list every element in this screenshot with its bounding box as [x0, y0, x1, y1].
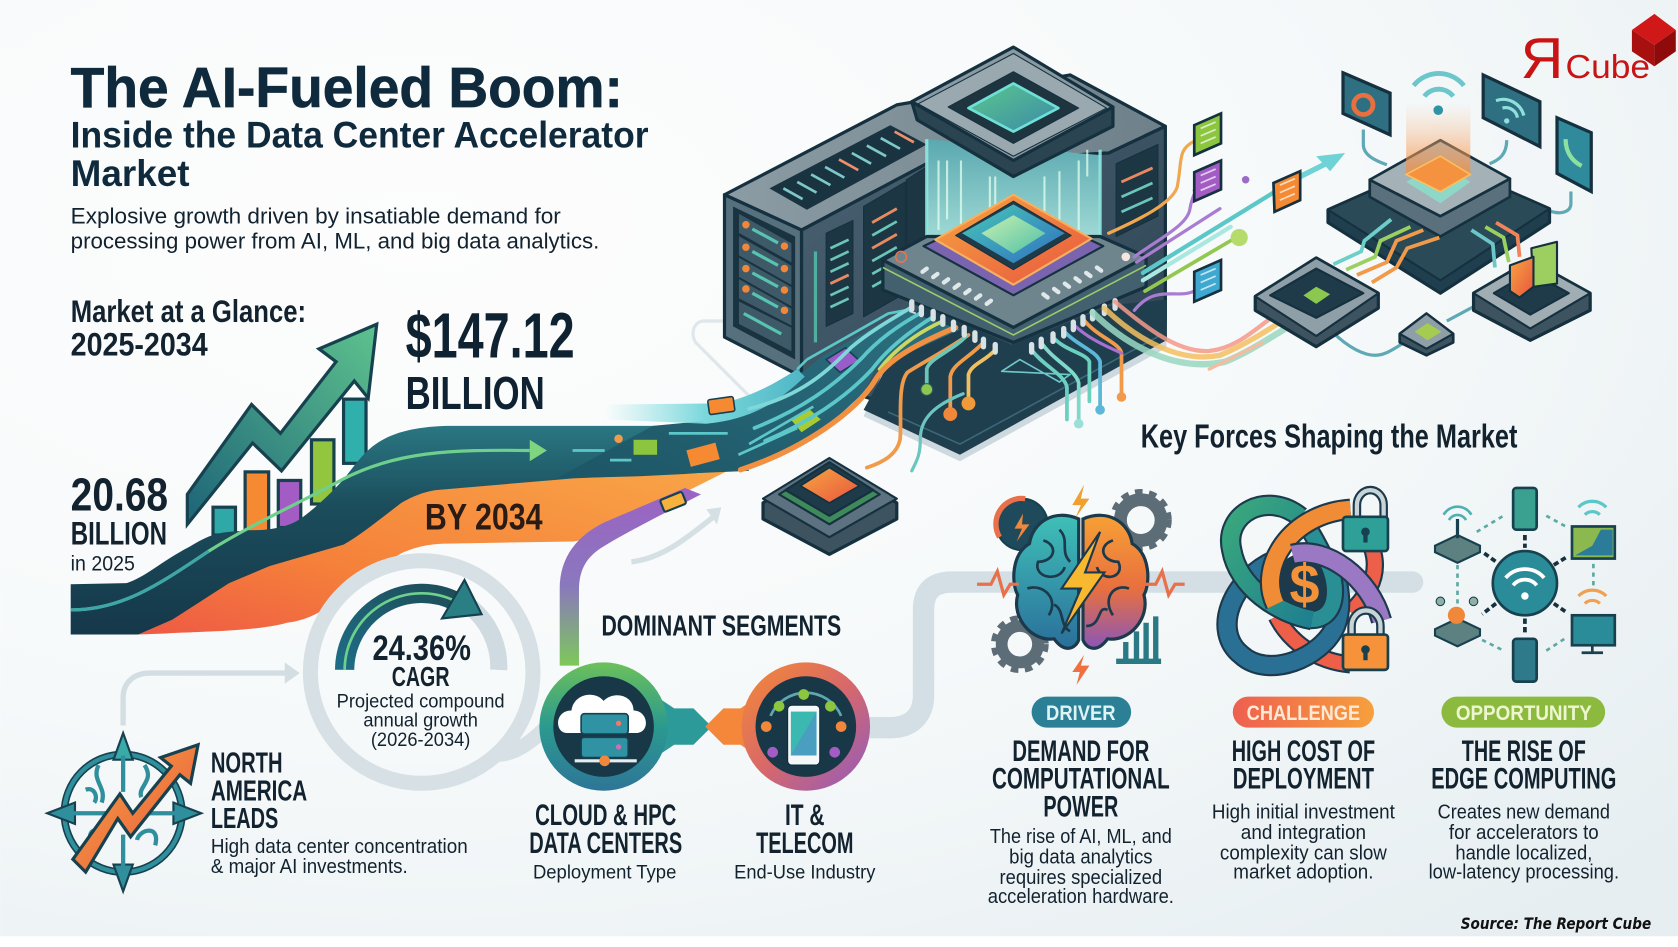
logo wordmark: Я [1521, 27, 1563, 91]
challenge text [1212, 735, 1395, 884]
pill: driver: DRIVER [1046, 701, 1116, 725]
floating chip [763, 458, 897, 554]
stream band outline [797, 310, 905, 369]
challenge text: market adoption. [1233, 862, 1373, 884]
pill: challenge [1233, 697, 1374, 728]
main title: The AI-Fueled Boom: [71, 57, 623, 120]
wires flowing right to edge node [1093, 302, 1306, 369]
chip package [883, 195, 1146, 342]
market at a glance heading [71, 294, 306, 362]
north america text: AMERICA [211, 775, 307, 807]
rack: column lines [830, 168, 1153, 307]
rack: top vent [769, 125, 927, 210]
teal ring [1231, 505, 1335, 620]
cagr text: CAGR [392, 661, 449, 692]
beam streaks [927, 139, 1100, 241]
rack: front face [802, 126, 1165, 428]
rack: left face [725, 195, 802, 377]
stream data packets [573, 348, 859, 467]
network: card phone [1557, 118, 1591, 192]
wire end dots [921, 384, 1126, 429]
stream green line and arrow [71, 440, 547, 610]
stat: 147.12 billion [406, 299, 575, 419]
lock teal [1343, 490, 1388, 551]
side card: green [1194, 113, 1221, 155]
bolt [1062, 532, 1104, 633]
side card: blue [1194, 260, 1221, 302]
stat: 147.12 billion: $147.12 [406, 299, 575, 371]
beam lines [939, 150, 1087, 246]
green and purple nodes [1231, 176, 1249, 246]
opportunity text: Creates new demand [1438, 802, 1610, 824]
icon: network opportunity [1435, 488, 1615, 682]
chip indicator dots [896, 251, 1130, 262]
driver text: big data analytics [1009, 847, 1153, 869]
driver text: The rise of AI, ML, and [990, 826, 1172, 848]
challenge text: High initial investment [1212, 802, 1395, 824]
gauge [996, 498, 1048, 550]
subtitle: Inside the Data Center Accelerator [71, 114, 649, 156]
growth stream: teal band [71, 419, 749, 635]
north america text: LEADS [211, 803, 278, 835]
arrow to floating chip [631, 516, 715, 562]
stat: 20.68 billion: BILLION [71, 516, 167, 552]
stream highlight [605, 369, 805, 424]
icon: telecom phone [742, 662, 870, 791]
network: bar node [1474, 242, 1590, 340]
segment labels: cloud: Deployment Type [533, 862, 676, 884]
dark backing [1275, 553, 1334, 613]
lock orange [1343, 610, 1388, 670]
icon: rings challenge [1227, 490, 1388, 670]
segment labels: telecom: IT & [785, 799, 825, 832]
side card: purple [1194, 161, 1221, 201]
logo: Cube [1566, 49, 1650, 86]
driver text: COMPUTATIONAL [992, 763, 1170, 796]
opportunity text: THE RISE OF [1462, 735, 1586, 768]
network: wifi [1414, 73, 1464, 115]
logo [1521, 14, 1676, 91]
blue ring [1227, 559, 1340, 666]
cagr text [337, 629, 505, 751]
wires flowing left to the stream [741, 307, 1121, 471]
market at a glance heading: 2025-2034 [71, 326, 208, 362]
driver text: POWER [1043, 790, 1119, 823]
network: card wifi [1483, 75, 1540, 147]
rack: vent lines [783, 138, 900, 199]
brain left [1014, 515, 1079, 648]
network: edge node [1255, 258, 1378, 347]
north america text: & major AI investments. [211, 856, 408, 878]
network: glow column [1406, 103, 1470, 175]
pill: opportunity: OPPORTUNITY [1456, 701, 1592, 725]
floating accelerator box [912, 47, 1113, 177]
driver text: DEMAND FOR [1012, 735, 1150, 768]
rack: front columns [826, 144, 1158, 326]
segment labels: telecom: TELECOM [756, 827, 853, 860]
opportunity text: low-latency processing. [1429, 862, 1619, 884]
driver text: requires specialized [1000, 867, 1162, 889]
card lines [1201, 122, 1295, 290]
rack: vent accents [839, 132, 914, 170]
description [71, 204, 599, 253]
by 2034 label: BY 2034 [425, 496, 543, 538]
network: small node [1400, 314, 1453, 355]
opportunity text: handle localized, [1455, 842, 1592, 864]
key forces heading: Key Forces Shaping the Market [1141, 418, 1517, 455]
dominant segments heading: DOMINANT SEGMENTS [601, 611, 841, 643]
icon: brain driver [977, 485, 1185, 685]
pill: driver [1032, 697, 1131, 728]
segment connectors [655, 693, 762, 760]
network: link lines [1333, 129, 1571, 355]
title block [71, 57, 649, 253]
network: wires [1333, 219, 1520, 282]
circuit board base [864, 300, 1166, 461]
dollar: $ [1289, 554, 1320, 616]
teal arrow to network [1300, 153, 1345, 177]
arrowhead [706, 507, 721, 524]
cagr ring [310, 561, 533, 783]
north america text [211, 748, 468, 878]
brain folds [1027, 530, 1129, 631]
wires from chip to side cards [1109, 141, 1273, 310]
rack: top face [725, 75, 1165, 230]
network: core [1406, 156, 1470, 192]
cagr gauge arc [345, 580, 499, 670]
segment labels: cloud [529, 799, 682, 884]
market at a glance heading: Market at a Glance: [71, 294, 306, 329]
opportunity text [1429, 735, 1619, 884]
background rounded line behind server [693, 321, 749, 396]
gears [994, 492, 1169, 670]
bar chart [213, 399, 366, 535]
icon: north america compass [47, 733, 201, 891]
challenge text: HIGH COST OF [1232, 735, 1375, 768]
pulses [977, 571, 1185, 595]
orange ring [1271, 509, 1350, 605]
description: processing power from AI, ML, and big data analytics. [71, 228, 599, 253]
challenge text: DEPLOYMENT [1233, 763, 1374, 796]
small packet on purple stream [660, 491, 686, 512]
cagr text: (2026-2034) [371, 730, 470, 751]
subtitle: Market [71, 152, 190, 194]
light beams [927, 139, 1100, 251]
sparks [1072, 485, 1089, 685]
stat: 20.68 billion [71, 468, 168, 575]
segment labels: cloud: DATA CENTERS [529, 827, 682, 860]
stat: 147.12 billion: BILLION [406, 367, 545, 419]
segment labels: cloud: CLOUD & HPC [535, 799, 676, 832]
rack: left panel [733, 207, 795, 360]
rack: column accents [830, 168, 1153, 284]
connector arrow north america to cagr [123, 662, 300, 725]
growth stream: orange band [138, 460, 749, 635]
driver text [988, 735, 1174, 908]
side card: orange [1273, 171, 1300, 212]
icon: cloud data centers [539, 662, 668, 791]
opportunity text: for accelerators to [1449, 822, 1599, 844]
lower pins [912, 301, 1115, 352]
bars [1116, 616, 1161, 661]
server rack [725, 75, 1165, 428]
logo cube [1632, 14, 1676, 66]
stream upper section [557, 310, 960, 478]
cagr text: 24.36% [372, 629, 471, 668]
segment labels: telecom [734, 799, 875, 884]
network: main node [1328, 140, 1550, 293]
rack: side strip [814, 251, 817, 342]
rack: tray lights [742, 221, 788, 334]
challenge text: complexity can slow [1220, 842, 1387, 864]
rack: trays [738, 213, 792, 352]
brain right [1083, 515, 1148, 648]
stat: 20.68 billion: in 2025 [71, 551, 135, 575]
segment labels: telecom: End-Use Industry [734, 862, 875, 884]
purple ring [1293, 553, 1382, 621]
description: Explosive growth driven by insatiable demand for [71, 204, 561, 229]
driver text: acceleration hardware. [988, 886, 1174, 908]
pill: opportunity [1441, 697, 1605, 728]
cagr text: Projected compound [337, 691, 505, 712]
chip small pins [922, 268, 1101, 304]
ring tail to segment circle [498, 728, 546, 754]
red ring [1277, 548, 1375, 665]
pill: challenge: CHALLENGE [1247, 701, 1360, 725]
subtitle [71, 114, 649, 194]
chip base stripes [883, 265, 1146, 335]
connector: forces pipeline [869, 582, 1413, 728]
purple connector stream [560, 488, 701, 666]
north america text: NORTH [211, 748, 283, 780]
stat: 20.68 billion: 20.68 [71, 468, 168, 520]
challenge text: and integration [1241, 822, 1366, 844]
north america text: High data center concentration [211, 836, 468, 858]
cagr text: annual growth [363, 711, 478, 732]
growth arrow [187, 324, 377, 524]
network: card gear [1343, 73, 1390, 135]
